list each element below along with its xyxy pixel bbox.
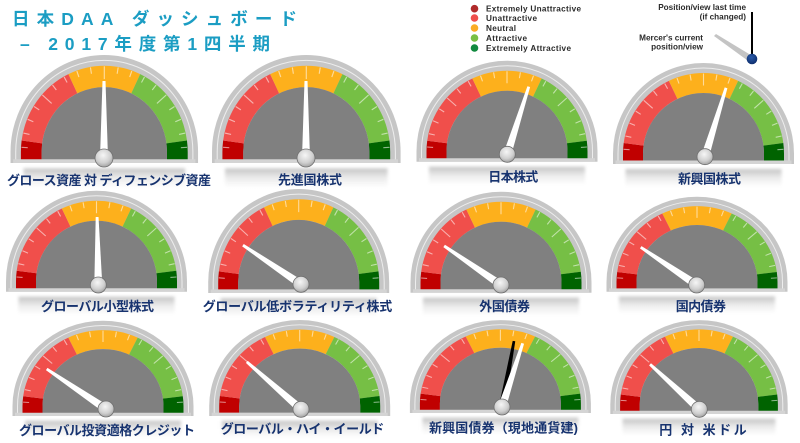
legend: Unattractive: [486, 14, 537, 23]
legend: Extremely Unattractive: [486, 5, 581, 14]
gauge: グローバル小型株式: [6, 191, 187, 315]
gauge: 新興国株式: 新興国株式: [678, 172, 741, 186]
gauge: 国内債券: 国内債券: [676, 299, 726, 314]
legend: Extremely Attractive: [486, 44, 571, 53]
title: [12, 9, 297, 54]
gauge: 外国債券: 外国債券: [479, 299, 530, 314]
gauge: グローバル小型株式: グローバル小型株式: [41, 299, 154, 314]
gauge: 新興国債券（現地通貨建): [410, 320, 591, 436]
gauge: グローバル・ハイ・イールド: [209, 320, 390, 438]
gauge: グロース資産 対 ディフェンシブ資産: グロース資産 対 ディフェンシブ資産: [7, 173, 211, 188]
gauge: 新興国債券（現地通貨建): 新興国債券（現地通貨建): [429, 420, 578, 436]
gauge: グローバル低ボラティリティ株式: [203, 189, 392, 317]
gauge: グローバル投資適格クレジット: グローバル投資適格クレジット: [19, 423, 195, 438]
needle key: position/view: [651, 42, 704, 52]
gauge: グローバル低ボラティリティ株式: グローバル低ボラティリティ株式: [203, 299, 392, 314]
gauge: 円 対 米ドル: 円 対 米ドル: [659, 422, 747, 438]
title: – 2017年度第1四半期: [20, 34, 270, 54]
gauge: 日本株式: 日本株式: [488, 170, 538, 184]
gauge: グローバル投資適格クレジット: [12, 321, 195, 438]
legend: Neutral: [486, 24, 516, 33]
needle key: Mercer's current: [639, 34, 703, 42]
needle key: (if changed): [700, 12, 746, 22]
gauge: グローバル・ハイ・イールド: グローバル・ハイ・イールド: [221, 422, 384, 436]
gauge: 日本株式: [416, 61, 598, 185]
gauge: 先進国株式: 先進国株式: [278, 172, 342, 188]
gauge: グロース資産 対 ディフェンシブ資産: [7, 55, 211, 188]
gauge: 先進国株式: [212, 55, 401, 188]
gauge: 円 対 米ドル: [610, 320, 788, 438]
needle key: [639, 3, 757, 64]
title: 日本DAA ダッシュボード: [12, 9, 297, 29]
gauge: 外国債券: [410, 192, 592, 316]
gauge: 国内債券: [606, 197, 788, 314]
needle key: Position/view last time: [658, 3, 746, 12]
legend: [471, 5, 581, 53]
legend: Attractive: [486, 34, 527, 43]
gauge: 新興国株式: [613, 63, 794, 187]
